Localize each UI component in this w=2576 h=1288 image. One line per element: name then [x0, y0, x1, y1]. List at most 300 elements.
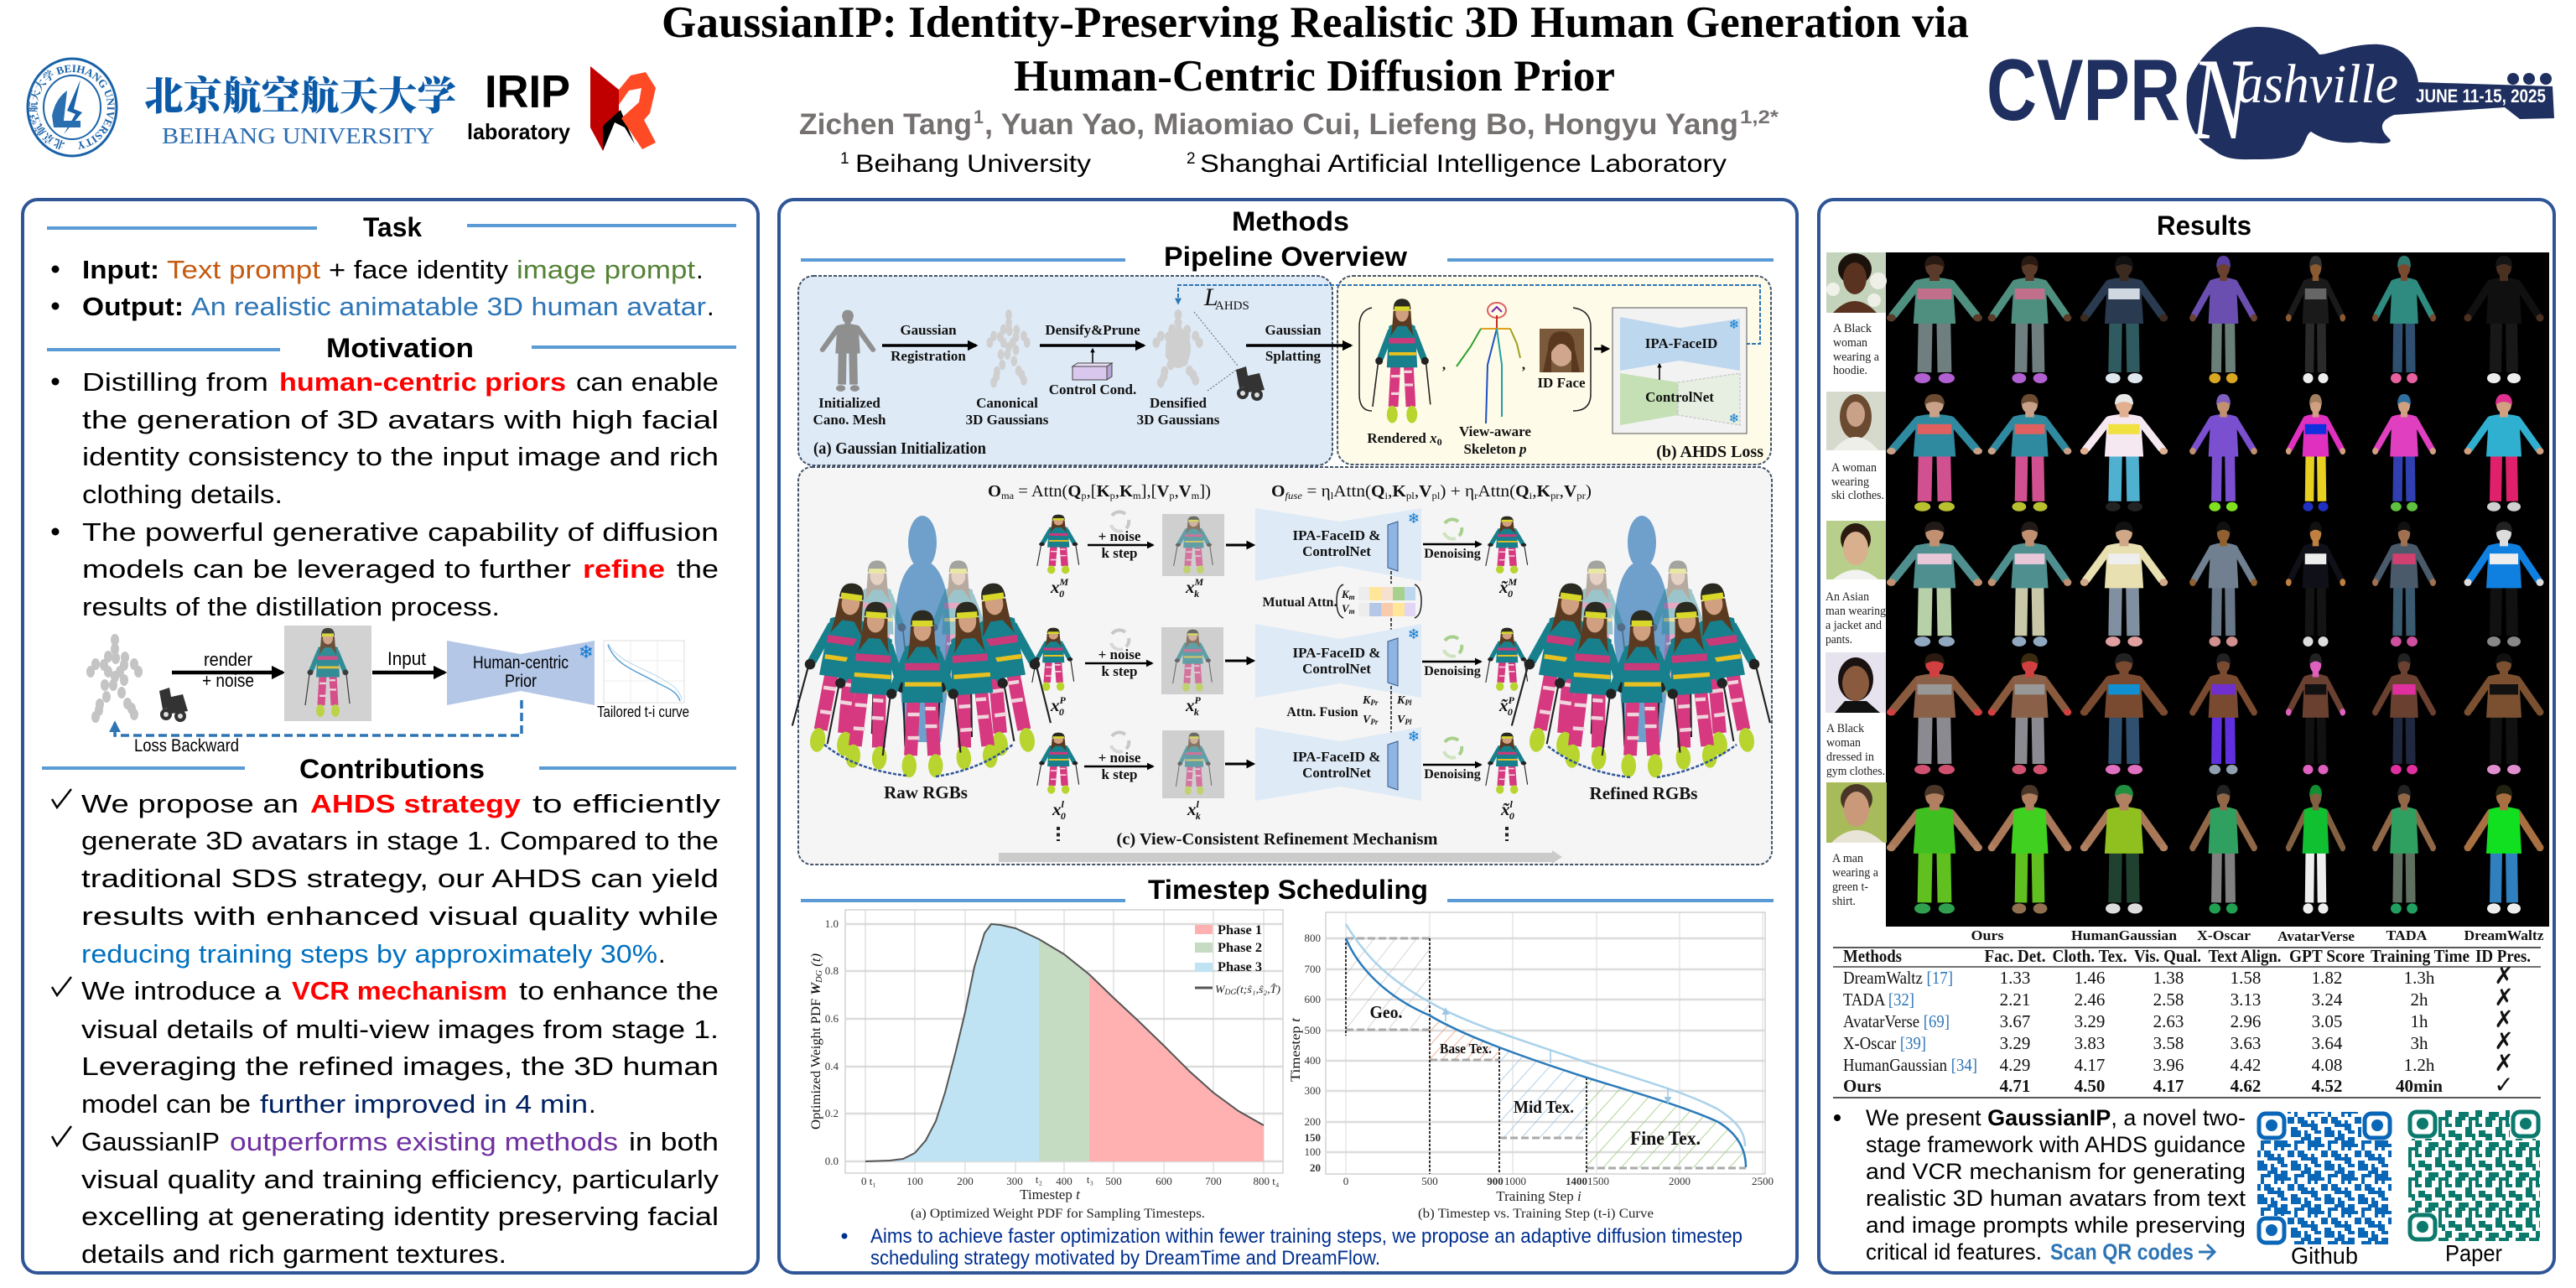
column labels: Ours — [1971, 927, 2004, 943]
text: conclusion: stage framework with AHDS guidance — [1866, 1132, 2246, 1157]
logo: CVPR Nashville guitar: CVPR — [1987, 42, 2180, 139]
panel: methods — [779, 200, 1797, 1273]
y axis labels: 800 — [1305, 932, 1321, 944]
heading: Pipeline Overview: Pipeline Overview — [1164, 242, 1407, 272]
formula: O_ma: ma — [1001, 490, 1015, 501]
row: view P: + noise — [1098, 647, 1141, 662]
y axis labels: 600 — [1305, 993, 1321, 1005]
title — [662, 0, 1969, 101]
face prompt 1 with caption: hoodie. — [1833, 364, 1867, 377]
table header — [1843, 946, 2531, 966]
table row: X-Oscar: X-Oscar [39] — [1843, 1033, 1926, 1053]
table row: AvatarVerse: 1h — [2410, 1011, 2428, 1031]
formula: O_fuse: Q — [1515, 482, 1530, 501]
text: motivation bullets: Distilling from — [82, 367, 268, 397]
caption (a): (a) Optimized Weight PDF for Sampling Timesteps. — [911, 1207, 1205, 1221]
row: view M: k — [1194, 588, 1199, 600]
face prompt 4 with caption — [1826, 652, 1886, 778]
label: rendered x0: 0 — [1437, 436, 1442, 448]
text: motivation bullets: results of the distillation process. — [82, 592, 500, 621]
panel: results — [1819, 200, 2554, 1273]
text: task bullets: Output: — [82, 292, 184, 321]
table row: TADA — [1843, 984, 2514, 1011]
affiliations: 1 — [840, 150, 849, 168]
row: view l — [1037, 727, 1528, 822]
formula: O_ma: m — [1133, 490, 1141, 501]
row: view M: x̃ — [1499, 577, 1508, 597]
row: view P: k step — [1102, 663, 1137, 679]
QR code: Github — [2257, 1112, 2392, 1269]
table header: Text Align. — [2209, 946, 2281, 966]
label: canonical gaussians: Canonical — [976, 395, 1038, 411]
row: view l: x̃ — [1501, 799, 1509, 819]
table row: AvatarVerse: 2.63 — [2153, 1011, 2184, 1031]
face prompt 5 with caption — [1826, 782, 1887, 908]
panel: (c) View-Consistent Refinement Mechanism — [789, 467, 1774, 865]
authors: Zichen Tang — [799, 108, 972, 141]
text: contributions list: We propose an — [81, 789, 299, 818]
arrow: gaussian registration — [882, 322, 976, 364]
column labels: DreamWaltz — [2464, 927, 2544, 943]
y axis labels: 0.0 — [825, 1155, 839, 1167]
table row: TADA: 3.24 — [2312, 989, 2343, 1010]
row: view P: x — [1186, 695, 1194, 715]
text: conclusion: and VCR mechanism for generating — [1866, 1159, 2246, 1184]
label: Refined RGBs: Refined RGBs — [1590, 783, 1697, 803]
legend: (t;ŝ₁,ŝ₂,T̂) — [1236, 983, 1280, 995]
formula: O_fuse: pr — [1550, 490, 1560, 501]
panel: (a) Gaussian Initialization — [798, 276, 1760, 465]
face prompt 3 with caption: pants. — [1826, 633, 1852, 647]
row: view l: 0 — [1509, 810, 1514, 822]
heading: Task: Task — [363, 212, 422, 242]
formula: O_ma: K — [1119, 482, 1133, 501]
icon: control condition box: Control Cond. — [1049, 382, 1136, 397]
table row: TADA: TADA [32] — [1843, 989, 1914, 1010]
face prompt 4 with caption: dressed in — [1826, 750, 1875, 764]
formula: O_fuse: fuse — [1285, 490, 1303, 501]
table row: DreamWaltz: 1.33 — [2000, 968, 2030, 988]
table row: Ours: 4.52 — [2312, 1076, 2342, 1096]
text: contributions list: VCR mechanism — [292, 976, 507, 1005]
table header: Methods — [1843, 946, 1902, 966]
text: contributions list: We introduce a — [81, 976, 282, 1005]
face prompt 1 with caption: wearing a — [1833, 351, 1880, 364]
y axis labels: 200 — [1305, 1115, 1321, 1128]
row: view l: k step — [1102, 766, 1137, 782]
x axis labels: 1000 — [1504, 1175, 1526, 1187]
image: noised render — [284, 626, 371, 721]
legend: DG — [1223, 988, 1237, 996]
hatched regions — [1346, 938, 1746, 1168]
row: view P: P — [1194, 694, 1201, 706]
arrow: input — [372, 648, 444, 673]
table row: TADA: 2.46 — [2075, 989, 2105, 1010]
text: contributions list — [52, 789, 721, 1269]
image: raw RGB avatars — [789, 516, 1054, 777]
table row: HumanGaussian: 4.42 — [2231, 1055, 2261, 1075]
y axis labels: 0.2 — [825, 1107, 839, 1119]
arrow: gaussian splatting: Gaussian — [1265, 322, 1322, 338]
label: densified gaussians — [1137, 395, 1220, 428]
human-centric prior network: Human-centric — [473, 653, 569, 673]
text: contributions list: . — [589, 1089, 596, 1119]
logo: IRIP laboratory: IRIP — [485, 65, 570, 117]
legend — [1195, 923, 1280, 996]
text: motivation bullets: identity consistency to the input image and rich — [82, 442, 719, 471]
formula: O_ma: V — [1157, 482, 1170, 501]
text: conclusion — [1834, 1105, 2246, 1265]
table row: DreamWaltz: 1.46 — [2075, 968, 2105, 988]
arrow: render + noise — [172, 649, 283, 691]
y axis labels: 700 — [1305, 963, 1321, 975]
attention fusion block: Pl — [1405, 699, 1412, 707]
y axis labels: 100 — [1305, 1145, 1321, 1158]
row: view l: k — [1196, 810, 1201, 822]
region labels: Base Tex. — [1440, 1041, 1492, 1057]
y axis labels: Optimized Weight PDF W — [809, 983, 823, 1130]
table row: HumanGaussian: 4.08 — [2312, 1055, 2342, 1075]
x axis labels: 700 — [1205, 1175, 1222, 1187]
text: contributions list: AHDS strategy — [310, 789, 522, 818]
label: skeleton: Skeleton p — [1463, 441, 1527, 457]
mutual attention block: V — [1342, 602, 1349, 615]
face prompt 4 with caption: gym clothes. — [1826, 765, 1885, 778]
caption (b): (b) Timestep vs. Training Step (t-i) Curve — [1418, 1207, 1654, 1221]
table row: TADA: 2.21 — [2000, 989, 2030, 1010]
table header: GPT Score — [2289, 946, 2365, 966]
formula: O_ma: , — [1115, 482, 1119, 501]
x axis labels: 200 — [957, 1175, 974, 1187]
attention fusion block: K — [1363, 694, 1370, 707]
row: view P: x — [1051, 695, 1060, 715]
formula: O_ma: K — [1097, 482, 1110, 501]
text: motivation bullets: can enable — [576, 367, 719, 397]
row: view P: 0 — [1059, 706, 1064, 718]
label: canonical gaussians — [966, 395, 1049, 428]
face prompt 3 with caption: man wearing — [1826, 605, 1886, 618]
panel: (b) AHDS Loss — [1337, 276, 1771, 465]
QR code: Paper: Paper — [2445, 1240, 2502, 1266]
row: view M: ❄ — [1408, 511, 1420, 527]
face prompt 4 with caption: woman — [1826, 736, 1862, 750]
region labels — [1370, 1002, 1701, 1149]
table row: DreamWaltz — [1843, 962, 2514, 989]
avatars: row 3 jacket and pants — [1887, 522, 2544, 647]
text: contributions list: . — [658, 939, 666, 969]
column labels: X-Oscar — [2197, 927, 2251, 943]
arrow: densify and prune — [1040, 322, 1144, 363]
label: skeleton — [1459, 356, 1531, 457]
y axis labels: 0.6 — [825, 1012, 839, 1025]
table row: DreamWaltz: 1.82 — [2312, 968, 2342, 988]
chart: timestep vs training step curve — [1289, 912, 1774, 1221]
formula: O_ma: O — [988, 482, 1001, 501]
table row: X-Oscar: 3h — [2410, 1033, 2428, 1053]
text: contributions list: details and rich garment textures. — [81, 1239, 506, 1269]
row: view M: M — [1194, 576, 1204, 588]
formula: O_fuse: Attn( — [1333, 482, 1371, 501]
x axis labels: 900 — [1487, 1175, 1504, 1187]
network: IPA-FaceID and ControlNet: IPA-FaceID — [1645, 335, 1717, 351]
diagram: distillation flow — [86, 626, 689, 756]
row: view l: ControlNet — [1302, 765, 1371, 781]
row: view M — [1037, 508, 1528, 600]
mutual attention block — [1263, 571, 1421, 636]
attention fusion block — [1286, 686, 1412, 740]
text: task bullets: . — [707, 292, 714, 321]
formula: O_ma: p — [1081, 490, 1087, 501]
text: motivation bullets: the generation of 3D avatars with high facial — [82, 405, 719, 434]
heading: Timestep Scheduling: Timestep Scheduling — [1148, 875, 1428, 905]
affiliations: Beihang University — [855, 150, 1091, 178]
row: view l: x — [1052, 799, 1062, 819]
mutual attention block: K — [1342, 588, 1349, 600]
x axis labels: Training Step i — [1496, 1188, 1581, 1204]
table row: TADA: 2.58 — [2153, 989, 2184, 1010]
face prompt 2 with caption: wearing — [1831, 475, 1869, 489]
image: ID face — [1537, 329, 1586, 391]
row: view M: + noise — [1098, 528, 1141, 544]
icon: densified gaussians — [1152, 309, 1203, 387]
y axis labels: 0.4 — [825, 1060, 839, 1072]
table header: Training Time — [2371, 946, 2470, 966]
table row: Ours — [1843, 1071, 2514, 1098]
label: rendered x0: , — [1442, 356, 1446, 372]
arrow: to network — [1594, 347, 1608, 351]
arrow: densify and prune: Densify&Prune — [1045, 322, 1140, 338]
text: contributions list: in both — [629, 1127, 719, 1156]
arrow: gaussian registration: Registration — [891, 348, 966, 364]
attention fusion block: Attn. Fusion — [1286, 705, 1358, 719]
text: motivation bullets: clothing details. — [82, 480, 283, 509]
formula: O_fuse: O — [1271, 482, 1285, 501]
row: view P: k — [1194, 706, 1199, 718]
legend: Phase 1 — [1218, 923, 1262, 937]
face prompt 5 with caption: A man — [1832, 852, 1864, 865]
attention fusion block: V — [1397, 714, 1405, 726]
heading: Motivation — [47, 333, 736, 363]
table header: Vis. Qual. — [2134, 946, 2201, 966]
text: task bullets: + face identity — [329, 255, 509, 284]
row: view l: Denoising — [1424, 767, 1481, 782]
table row: X-Oscar: 3.63 — [2231, 1033, 2261, 1053]
label: Raw RGBs: Raw RGBs — [884, 782, 968, 802]
heading: Results: Results — [2157, 210, 2251, 241]
heading: Contributions: Contributions — [299, 754, 485, 784]
formula: O_ma: m — [1192, 490, 1200, 501]
table row: Ours: 4.50 — [2075, 1076, 2105, 1096]
region labels: Mid Tex. — [1514, 1097, 1574, 1117]
formula: O_fuse: Q — [1371, 482, 1385, 501]
text: timestep scheduling note: Aims to achieve faster optimization within fewer training steps, we propose an adaptive diffusion timestep — [870, 1225, 1742, 1248]
column labels: HumanGaussian — [2071, 927, 2178, 943]
legend: Phase 2 — [1218, 941, 1262, 955]
y axis labels: 500 — [1305, 1024, 1321, 1036]
text: task bullets — [52, 255, 714, 321]
face prompt 5 with caption: wearing a — [1832, 866, 1879, 880]
row: view M: ControlNet — [1302, 543, 1371, 559]
row: view P — [1032, 624, 1528, 718]
human-centric prior network — [447, 641, 595, 705]
column labels: AvatarVerse — [2277, 928, 2355, 944]
attention fusion block: Pr — [1370, 699, 1379, 707]
formula: O_fuse: i — [1385, 490, 1389, 501]
label: rendered x0: Rendered x — [1367, 430, 1437, 446]
image: avatar grid background — [1886, 252, 2549, 927]
text: contributions list: visual quality and training efficiency, particularly — [81, 1165, 719, 1194]
icon: canonical mesh — [820, 310, 875, 392]
network: IPA-FaceID and ControlNet: ❄ — [1729, 317, 1739, 332]
formula: O_fuse: pl — [1431, 490, 1441, 501]
label: mesh: Initialized — [818, 395, 880, 411]
table row: HumanGaussian: 4.29 — [2000, 1055, 2030, 1075]
text: task bullets: An realistic animatable 3D human avatar — [191, 292, 706, 321]
y axis labels: 400 — [1305, 1054, 1321, 1067]
text: conclusion: Scan QR codes — [2050, 1239, 2194, 1265]
x axis labels — [861, 1173, 1280, 1202]
formula: O_ma: ,[ — [1087, 482, 1097, 501]
text: contributions list: reducing training steps by approximately 30% — [81, 939, 657, 969]
table row: X-Oscar — [1843, 1027, 2514, 1055]
table row: AvatarVerse: ✗ — [2494, 1005, 2514, 1033]
formula: O_fuse: ) — [1586, 482, 1592, 501]
avatars: row 2 ski clothes — [1887, 394, 2544, 512]
face prompt 3 with caption: a jacket and — [1826, 619, 1883, 632]
title: Human-Centric Diffusion Prior — [1014, 52, 1615, 101]
icon: view-aware skeleton — [1457, 303, 1520, 423]
text: timestep scheduling note — [842, 1225, 1742, 1270]
column labels — [1971, 927, 2544, 944]
QR code: Paper — [2408, 1110, 2540, 1266]
x axis labels: t₃ — [1087, 1173, 1093, 1186]
arcs: raw views — [824, 744, 1014, 776]
x axis labels: 1500 — [1587, 1175, 1609, 1187]
row: view M: M — [1508, 576, 1518, 588]
label: L AHDS: AHDS — [1215, 299, 1249, 313]
row: view M: k step — [1102, 545, 1137, 561]
formula: O_fuse: l — [1331, 490, 1334, 501]
row: view P: ❄ — [1408, 626, 1420, 643]
icon: canonical gaussians — [986, 309, 1031, 387]
chart: optimized weight PDF — [809, 910, 1283, 1221]
formula: O_fuse: V — [1419, 482, 1432, 501]
formula: O_fuse: i — [1530, 490, 1533, 501]
row: view l: ❄ — [1408, 729, 1420, 745]
bracket: inputs — [1359, 308, 1591, 411]
text: contributions list: results with enhanced visual quality while — [81, 901, 719, 931]
formula: O_ma: p — [1169, 490, 1175, 501]
logo: CVPR Nashville guitar: ashville — [2237, 54, 2398, 115]
label: (b) AHDS Loss: (b) AHDS Loss — [1656, 443, 1763, 461]
table row: X-Oscar: 3.58 — [2153, 1033, 2184, 1053]
logo: CVPR Nashville guitar: JUNE 11-15, 2025 — [2416, 86, 2546, 106]
formula: O_fuse: Attn( — [1478, 482, 1516, 501]
image: ID face: ID Face — [1537, 375, 1586, 391]
table row: HumanGaussian — [1843, 1049, 2514, 1077]
text: motivation bullets — [52, 367, 719, 621]
x axis labels: 2000 — [1669, 1175, 1690, 1187]
table row: TADA: ✗ — [2494, 984, 2514, 1011]
table row: AvatarVerse: 3.67 — [2000, 1011, 2030, 1031]
row: view M: 0 — [1508, 588, 1513, 600]
row: view l: l — [1196, 798, 1199, 810]
arrow: render + noise: render — [204, 649, 252, 670]
x axis labels: 100 — [906, 1175, 923, 1187]
table row: X-Oscar: ✗ — [2494, 1027, 2514, 1055]
x axis labels: 0 — [1343, 1175, 1348, 1187]
face prompt 5 with caption: shirt. — [1832, 895, 1856, 908]
row: view P: IPA-FaceID & — [1293, 645, 1380, 661]
x axis labels: 1400 — [1566, 1175, 1587, 1187]
avatars: row 4 gym clothes — [1887, 653, 2544, 774]
y axis labels: 1.0 — [825, 917, 839, 930]
text: timestep scheduling note: scheduling strategy motivated by DreamTime and DreamFlow. — [870, 1247, 1380, 1270]
formula: O_fuse: , — [1415, 482, 1419, 501]
table row: TADA: 3.13 — [2231, 989, 2261, 1010]
arrow: gaussian splatting — [1246, 322, 1351, 364]
text: contributions list: Leveraging the refined images, the 3D human — [81, 1052, 719, 1081]
text: contributions list: outperforms existing methods — [230, 1127, 618, 1156]
row: view M: Denoising — [1424, 547, 1481, 561]
formula: O_ma: Q — [1067, 482, 1081, 501]
heading: Task — [47, 212, 736, 242]
y axis labels — [809, 917, 839, 1167]
row: view l: IPA-FaceID & — [1293, 749, 1380, 765]
QR code: Github: Github — [2291, 1243, 2358, 1269]
row: view l: + noise — [1098, 750, 1141, 766]
arrow: loss backward: Loss Backward — [134, 736, 239, 756]
face prompt 3 with caption: An Asian — [1826, 590, 1870, 604]
table header: ID Pres. — [2475, 946, 2531, 966]
logo: Beihang wordmark: 北京航空航天大学 — [144, 75, 456, 119]
chart: tailored t-i curve: Tailored t-i curve — [597, 704, 689, 720]
row: view M: IPA-FaceID & — [1293, 527, 1380, 543]
text: conclusion: critical id features. — [1866, 1239, 2042, 1265]
text: contributions list: to enhance the — [519, 976, 719, 1005]
row: view M: 0 — [1059, 588, 1064, 600]
x axis labels — [1343, 1175, 1774, 1204]
x axis labels: 800 t₄ — [1254, 1175, 1280, 1187]
text: task bullets: Input: — [82, 255, 159, 284]
formula: O_ma: ],[ — [1141, 482, 1157, 501]
arrow: gaussian splatting: Splatting — [1265, 348, 1322, 364]
label: densified gaussians: Densified — [1150, 395, 1208, 411]
arrow: loss backward — [115, 700, 522, 756]
attention fusion block: K — [1397, 694, 1405, 707]
affiliations — [840, 150, 1727, 178]
table row: AvatarVerse: 2.96 — [2231, 1011, 2261, 1031]
table row: DreamWaltz: DreamWaltz [17] — [1843, 968, 1953, 988]
table row: Ours: 4.17 — [2153, 1076, 2184, 1096]
row: view P: ControlNet — [1302, 661, 1371, 677]
chart: tailored t-i curve — [597, 641, 689, 720]
icon: control condition box — [1049, 363, 1136, 397]
text: task bullets: . — [696, 255, 704, 284]
text: motivation bullets: the — [677, 554, 719, 584]
y axis labels: 300 — [1305, 1084, 1321, 1097]
affiliations: Shanghai Artificial Intelligence Laboratory — [1200, 150, 1727, 178]
text: conclusion: We present GaussianIP, a novel two- — [1866, 1105, 2246, 1130]
formula: O_fuse: pl — [1406, 490, 1415, 501]
icon: check marks — [52, 789, 71, 1145]
icon: gaussian points — [86, 634, 143, 723]
face prompt 2 with caption: ski clothes. — [1831, 489, 1884, 502]
table: quantitative comparison — [1833, 946, 2541, 1098]
arrow: input: Input — [387, 648, 426, 669]
x axis labels: t₂ — [1036, 1173, 1042, 1186]
label: rendered x0 — [1367, 356, 1446, 448]
